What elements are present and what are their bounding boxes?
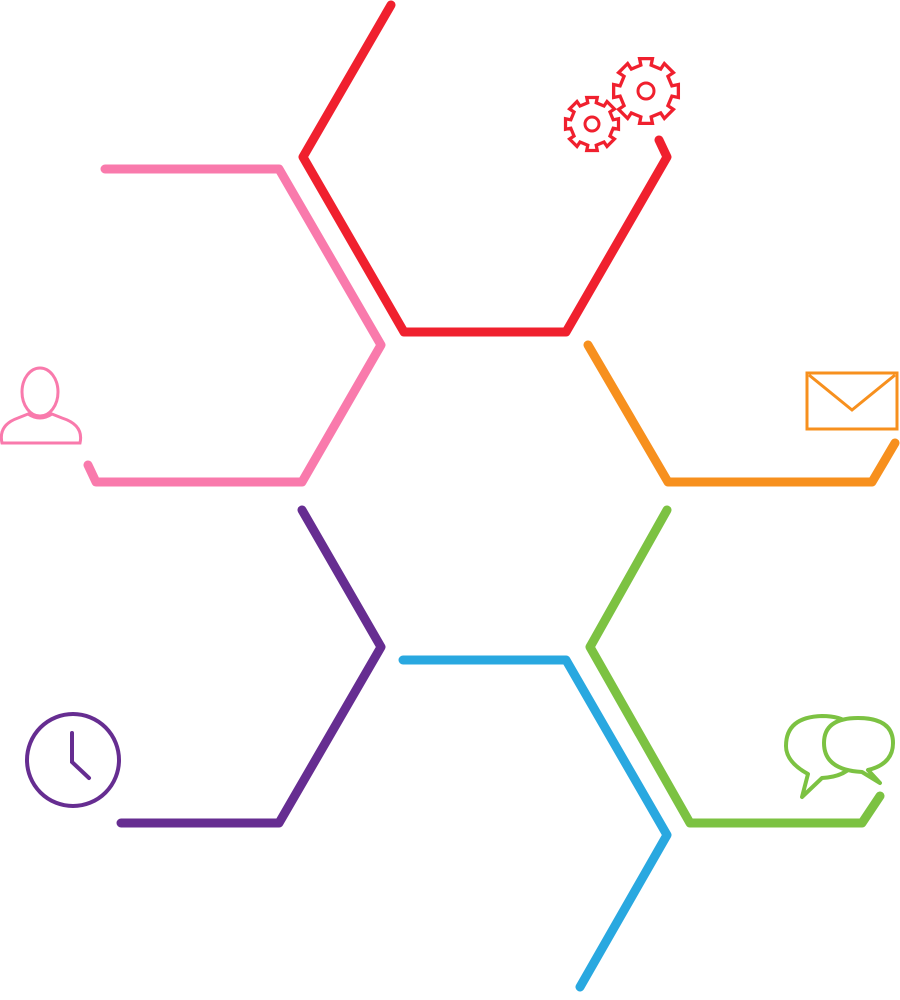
- icon: speech bubbles: [786, 716, 893, 797]
- segment: orange: [588, 345, 895, 482]
- segment: green: [590, 510, 880, 823]
- icon: clock: [27, 714, 119, 806]
- segment: red: [303, 5, 667, 332]
- segment: blue: [403, 660, 667, 987]
- icon: person: [1, 368, 81, 443]
- icon: gears: [566, 59, 678, 150]
- icon: envelope: [807, 373, 897, 429]
- segment: pink: [88, 169, 381, 482]
- segment: purple: [121, 510, 381, 823]
